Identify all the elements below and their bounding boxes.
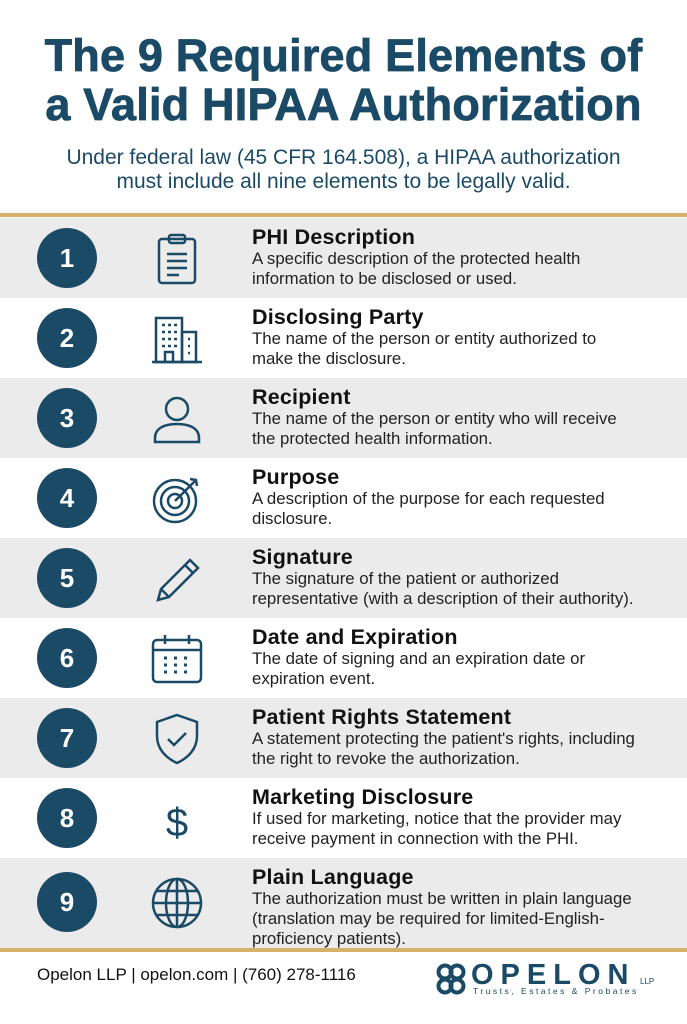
row 9: The authorization must be written in plain language: [252, 889, 632, 908]
row 6: The date of signing and an expiration date or: [252, 649, 585, 668]
icon: shield: [156, 714, 198, 764]
row 8: Marketing Disclosure: [252, 785, 473, 809]
icon: building: [152, 316, 202, 364]
row 3: 3: [60, 403, 74, 433]
row 3: the protected health information.: [252, 429, 493, 448]
row 3: The name of the person or entity who will receive: [252, 409, 617, 428]
row 2: 2: [60, 323, 74, 353]
row 5: 5: [60, 563, 74, 593]
row 9: Plain Language: [252, 865, 414, 889]
icon: target: [152, 478, 198, 524]
row 4: disclosure.: [252, 509, 332, 528]
icon: person: [154, 396, 200, 444]
row 8: 8: [60, 803, 74, 833]
icon: calendar: [152, 635, 202, 684]
footer contact: Opelon LLP | opelon.com | (760) 278-1116: [37, 965, 356, 984]
row 6: 6: [60, 643, 74, 673]
row 4: 4: [60, 483, 74, 513]
row 4: [37, 465, 605, 528]
title: a Valid HIPAA Authorization: [45, 79, 642, 130]
row 9: proficiency patients).: [252, 929, 406, 948]
row 7: the right to revoke the authorization.: [252, 749, 520, 768]
logo: Trusts, Estates & Probates: [473, 986, 639, 996]
row 5: The signature of the patient or authorized: [252, 569, 559, 588]
row 3: Recipient: [252, 385, 351, 409]
row 5: Signature: [252, 545, 353, 569]
row 1: [0, 218, 687, 298]
row 1: information to be disclosed or used.: [252, 269, 517, 288]
row 7: Patient Rights Statement: [252, 705, 511, 729]
row 1: PHI Description: [252, 225, 415, 249]
row 9: [0, 858, 687, 948]
row 4: A description of the purpose for each requested: [252, 489, 605, 508]
row 5: [0, 538, 687, 618]
icon: clipboard: [158, 234, 196, 284]
row 2: Disclosing Party: [252, 305, 424, 329]
row 6: expiration event.: [252, 669, 375, 688]
row 1: A specific description of the protected health: [252, 249, 580, 268]
row 7: A statement protecting the patient's rights, including: [252, 729, 635, 748]
row 6: [37, 625, 585, 688]
row 6: Date and Expiration: [252, 625, 458, 649]
row 3: [0, 378, 687, 458]
row 8: receive payment in connection with the PHI.: [252, 829, 578, 848]
row 9: 9: [60, 887, 74, 917]
icon: globe: [152, 878, 202, 928]
icon: dollar: $: [166, 801, 188, 845]
row 2: The name of the person or entity authorized to: [252, 329, 596, 348]
row 8: [37, 785, 622, 848]
row 2: make the disclosure.: [252, 349, 406, 368]
row 7: [0, 698, 687, 778]
title: The 9 Required Elements of: [45, 30, 642, 81]
subtitle: [66, 146, 621, 193]
row 7: 7: [60, 723, 74, 753]
logo: [436, 960, 654, 996]
row 5: representative (with a description of their authority).: [252, 589, 634, 608]
row 1: 1: [60, 243, 74, 273]
subtitle: Under federal law (45 CFR 164.508), a HIPAA authorization: [66, 146, 621, 169]
icon: pen: [156, 558, 200, 602]
row 4: Purpose: [252, 465, 339, 489]
row 8: If used for marketing, notice that the provider may: [252, 809, 621, 828]
subtitle: must include all nine elements to be legally valid.: [116, 170, 571, 193]
row 9: (translation may be required for limited-English-: [252, 909, 605, 928]
logo: LLP: [640, 977, 654, 986]
row 2: [37, 305, 596, 368]
title: [44, 30, 643, 130]
